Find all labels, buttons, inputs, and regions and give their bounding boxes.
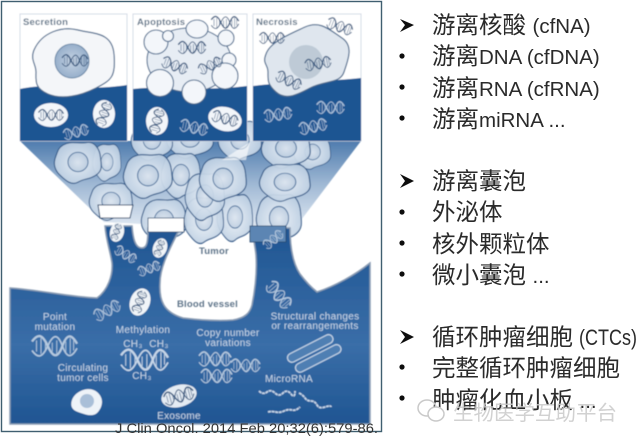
list: cell-free nucleic acids: 游离DNA (cfDNA) <box>432 43 600 69</box>
list: cell-free nucleic acids: 游离miRNA ... <box>432 106 566 132</box>
secreting cell <box>33 29 114 97</box>
panel: biology figure frame <box>2 2 382 432</box>
released DNA <box>260 17 354 135</box>
entry boxes <box>98 205 286 242</box>
structural changes <box>271 312 359 374</box>
methylation: Methylation <box>116 325 170 336</box>
watermark: 生物医学互助平台 <box>453 396 617 426</box>
methylation: CH₃ <box>132 371 152 382</box>
point mutation: mutation <box>35 322 75 333</box>
citation: J Clin Oncol. 2014 Feb 20;32(6):579-86. <box>115 420 378 436</box>
label: Secretion <box>23 17 68 28</box>
label: Necrosis <box>256 17 298 28</box>
illustration <box>10 14 370 424</box>
list: circulating tumor cells <box>399 324 637 413</box>
list: cell-free nucleic acids: 游离RNA (cfRNA) <box>432 75 600 101</box>
tumor label: Tumor <box>199 246 229 257</box>
list: cell-free nucleic acids: 游离核酸 (cfNA) <box>432 12 591 38</box>
circulating tumor cells: tumor cells <box>57 373 109 384</box>
methylation: CH₃ <box>123 339 143 350</box>
list: vesicles: 外泌体 <box>432 199 502 225</box>
copy number variations: Copy number <box>196 328 260 339</box>
list: vesicles: 核外颗粒体 <box>432 231 550 257</box>
exosomes <box>34 100 115 141</box>
structural changes: or rearrangements <box>271 321 359 332</box>
vessel label: Blood vessel <box>177 299 238 310</box>
necrotic cell <box>265 25 349 96</box>
list: vesicles: 微小囊泡 ... <box>432 262 550 288</box>
apoptotic cell with blebs <box>144 20 238 104</box>
point mutation <box>32 312 77 356</box>
exosome: Exosome <box>157 411 201 422</box>
apoptotic bodies <box>146 103 245 136</box>
bullet lists <box>399 12 637 413</box>
circulating tumor cells <box>57 363 109 415</box>
list: vesicles <box>399 168 550 288</box>
exosome <box>157 381 201 422</box>
methylation <box>116 325 170 382</box>
list: cell-free nucleic acids <box>399 12 600 132</box>
circulating tumor cells: Circulating <box>58 363 108 374</box>
structural changes: Structural changes <box>271 312 359 322</box>
point mutation: Point <box>43 312 67 323</box>
microRNA: MicroRNA <box>265 374 313 385</box>
panel: necrosis <box>253 14 361 141</box>
list: vesicles: 游离囊泡 <box>432 168 526 194</box>
microRNA <box>259 374 331 412</box>
list: circulating tumor cells: 肿瘤化血小板 ... <box>432 387 597 413</box>
funnel: tumor tissue <box>20 119 361 244</box>
panel: apoptosis <box>133 14 247 141</box>
list: circulating tumor cells: 完整循环肿瘤细胞 <box>432 355 620 381</box>
panel: secretion <box>20 14 127 141</box>
fragmented DNA <box>161 16 239 75</box>
copy number variations: variations <box>205 338 251 349</box>
channel fragments <box>92 221 294 322</box>
label: Apoptosis <box>137 17 185 28</box>
bloodstream <box>10 205 370 424</box>
methylation: CH₃ <box>149 339 169 350</box>
copy number variations <box>196 328 260 383</box>
list: circulating tumor cells: 循环肿瘤细胞 <box>432 324 573 350</box>
